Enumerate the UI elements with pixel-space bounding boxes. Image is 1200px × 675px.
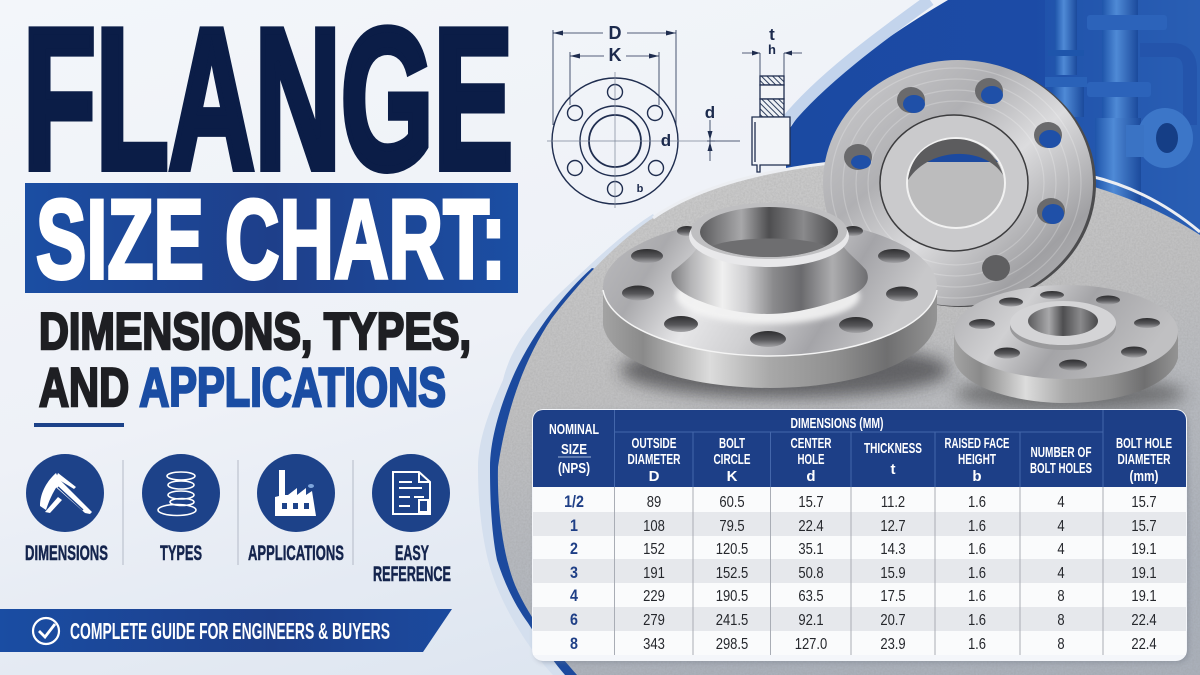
banner text: COMPLETE GUIDE FOR ENGINEERS & BUYERS [70, 618, 390, 644]
table header: CIRCLE [714, 451, 750, 468]
table rows: 79.5 [719, 518, 745, 535]
table rows: 279 [643, 612, 665, 629]
table rows: 1.6 [968, 565, 986, 582]
front view drawing [547, 30, 715, 208]
table header: CENTER [790, 435, 832, 452]
label: easy reference [373, 542, 451, 586]
subtitle band: SIZE CHART: [36, 177, 506, 302]
label: easy reference: EASY [395, 542, 429, 565]
table header: d [806, 468, 816, 485]
label: types: TYPES [160, 542, 202, 565]
dimension letters: t [769, 25, 775, 44]
label: easy reference: REFERENCE [373, 563, 451, 586]
table rows: 15.7 [798, 494, 824, 511]
table rows: 343 [643, 636, 665, 653]
table rows: 60.5 [719, 494, 745, 511]
table header: (NPS) [558, 460, 590, 477]
table header: OUTSIDE [632, 435, 676, 452]
table rows: 6 [570, 611, 578, 629]
dimension arrows [553, 30, 792, 151]
table rows: 92.1 [798, 612, 824, 629]
dimension letters: b [637, 183, 644, 195]
table rows: 35.1 [798, 541, 824, 558]
label: dimensions: DIMENSIONS [25, 542, 108, 565]
table header: b [972, 468, 982, 485]
table rows: 22.4 [1131, 612, 1157, 629]
table rows: 20.7 [880, 612, 906, 629]
table header [533, 410, 1186, 487]
table header: BOLT [719, 435, 745, 452]
table header: SIZE [561, 441, 587, 458]
table rows: 8 [1057, 588, 1065, 605]
table rows: 298.5 [716, 636, 748, 653]
table rows: 15.7 [1131, 518, 1157, 535]
table header: t [890, 461, 896, 478]
subtitle band [25, 177, 518, 302]
table rows: 12.7 [880, 518, 906, 535]
table header: DIAMETER [628, 451, 681, 468]
center hole [907, 138, 1005, 228]
table rows: 19.1 [1131, 565, 1157, 582]
table rows: 1.6 [968, 636, 986, 653]
feature: applications [248, 454, 344, 565]
table rows: 191 [643, 565, 665, 582]
title underline [34, 423, 124, 427]
small flange hub [1010, 304, 1116, 350]
icon: document [393, 472, 430, 514]
icon: check mark [33, 618, 59, 644]
table header: K [727, 468, 738, 485]
icon: caliper [40, 473, 92, 514]
feature: easy reference [372, 454, 451, 586]
guide banner [0, 609, 452, 652]
table header: DIAMETER [1118, 451, 1171, 468]
dimension letters: d [661, 131, 671, 150]
table rows: 63.5 [798, 588, 824, 605]
table header: HOLE [798, 451, 824, 468]
flange: small slip-on [954, 285, 1185, 412]
neck hub [676, 268, 860, 324]
table rows: 14.3 [880, 541, 906, 558]
feature: types [142, 454, 220, 565]
table rows: 22.4 [798, 518, 824, 535]
table rows: 127.0 [795, 636, 827, 653]
dimension letters: d [705, 103, 715, 122]
icon: flange stack [158, 472, 196, 516]
table rows: 4 [1057, 494, 1065, 511]
table rows: 22.4 [1131, 636, 1157, 653]
table rows: 17.5 [880, 588, 906, 605]
table header: D [649, 468, 660, 485]
heading line: dimensions, types: DIMENSIONS, TYPES, [39, 303, 471, 361]
table rows: 120.5 [716, 541, 748, 558]
table rows: 1.6 [968, 588, 986, 605]
table rows: 1.6 [968, 541, 986, 558]
table rows: 1/2 [564, 493, 584, 511]
table rows: 23.9 [880, 636, 906, 653]
table rows: 241.5 [716, 612, 748, 629]
table header: NUMBER OF [1030, 444, 1092, 461]
table rows: 4 [1057, 541, 1065, 558]
size chart table [532, 409, 1188, 662]
table header: NOMINAL [549, 421, 599, 438]
flange: weld neck [603, 203, 950, 398]
table header: THICKNESS [864, 440, 922, 457]
label: applications: APPLICATIONS [248, 542, 344, 565]
table header: RAISED FACE [944, 435, 1010, 452]
table rows: 1.6 [968, 518, 986, 535]
table rows: 2 [570, 540, 578, 558]
dimension letters: K [608, 45, 622, 65]
technical drawing: flange front view and section [547, 23, 802, 208]
table header: BOLT HOLES [1030, 460, 1092, 477]
table rows: 8 [1057, 636, 1065, 653]
table rows [533, 487, 1186, 655]
table header: DIMENSIONS (MM) [790, 415, 884, 432]
table rows: 50.8 [798, 565, 824, 582]
table rows: 229 [643, 588, 665, 605]
metal plate background [498, 159, 1200, 675]
table rows: 19.1 [1131, 541, 1157, 558]
table rows: 11.2 [881, 494, 905, 511]
curved accent band [478, 0, 930, 675]
dimension letters: D [608, 23, 622, 43]
table rows: 1.6 [968, 612, 986, 629]
table rows: 19.1 [1131, 588, 1157, 605]
table rows: 1.6 [968, 494, 986, 511]
dimension letters [608, 23, 776, 195]
table rows: 3 [570, 564, 578, 582]
table rows: 4 [1057, 518, 1065, 535]
feature: dimensions [25, 454, 108, 565]
heading line: and applications: AND APPLICATIONS [39, 356, 446, 418]
industrial pipe background [786, 0, 1200, 260]
section view drawing [707, 53, 802, 172]
bolt holes [844, 78, 1065, 281]
table rows: 4 [1057, 565, 1065, 582]
flange bolt holes [622, 226, 918, 347]
table rows: 8 [570, 635, 578, 653]
table rows: 89 [647, 494, 661, 511]
small flange bolt holes [969, 291, 1160, 370]
table rows: 15.7 [1131, 494, 1157, 511]
table rows: 108 [643, 518, 665, 535]
table rows: 4 [570, 587, 578, 605]
dimension letters: h [768, 42, 776, 57]
table header: (mm) [1130, 468, 1158, 485]
table rows: 8 [1057, 612, 1065, 629]
table rows: 1 [570, 517, 578, 535]
flange: upright slip-on [823, 60, 1096, 307]
table rows: 152.5 [716, 565, 748, 582]
table header: HEIGHT [958, 451, 996, 468]
table rows: 190.5 [716, 588, 748, 605]
icon: factory [275, 470, 316, 516]
table rows: 152 [643, 541, 665, 558]
table header: BOLT HOLE [1116, 435, 1172, 452]
table rows: 15.9 [880, 565, 906, 582]
